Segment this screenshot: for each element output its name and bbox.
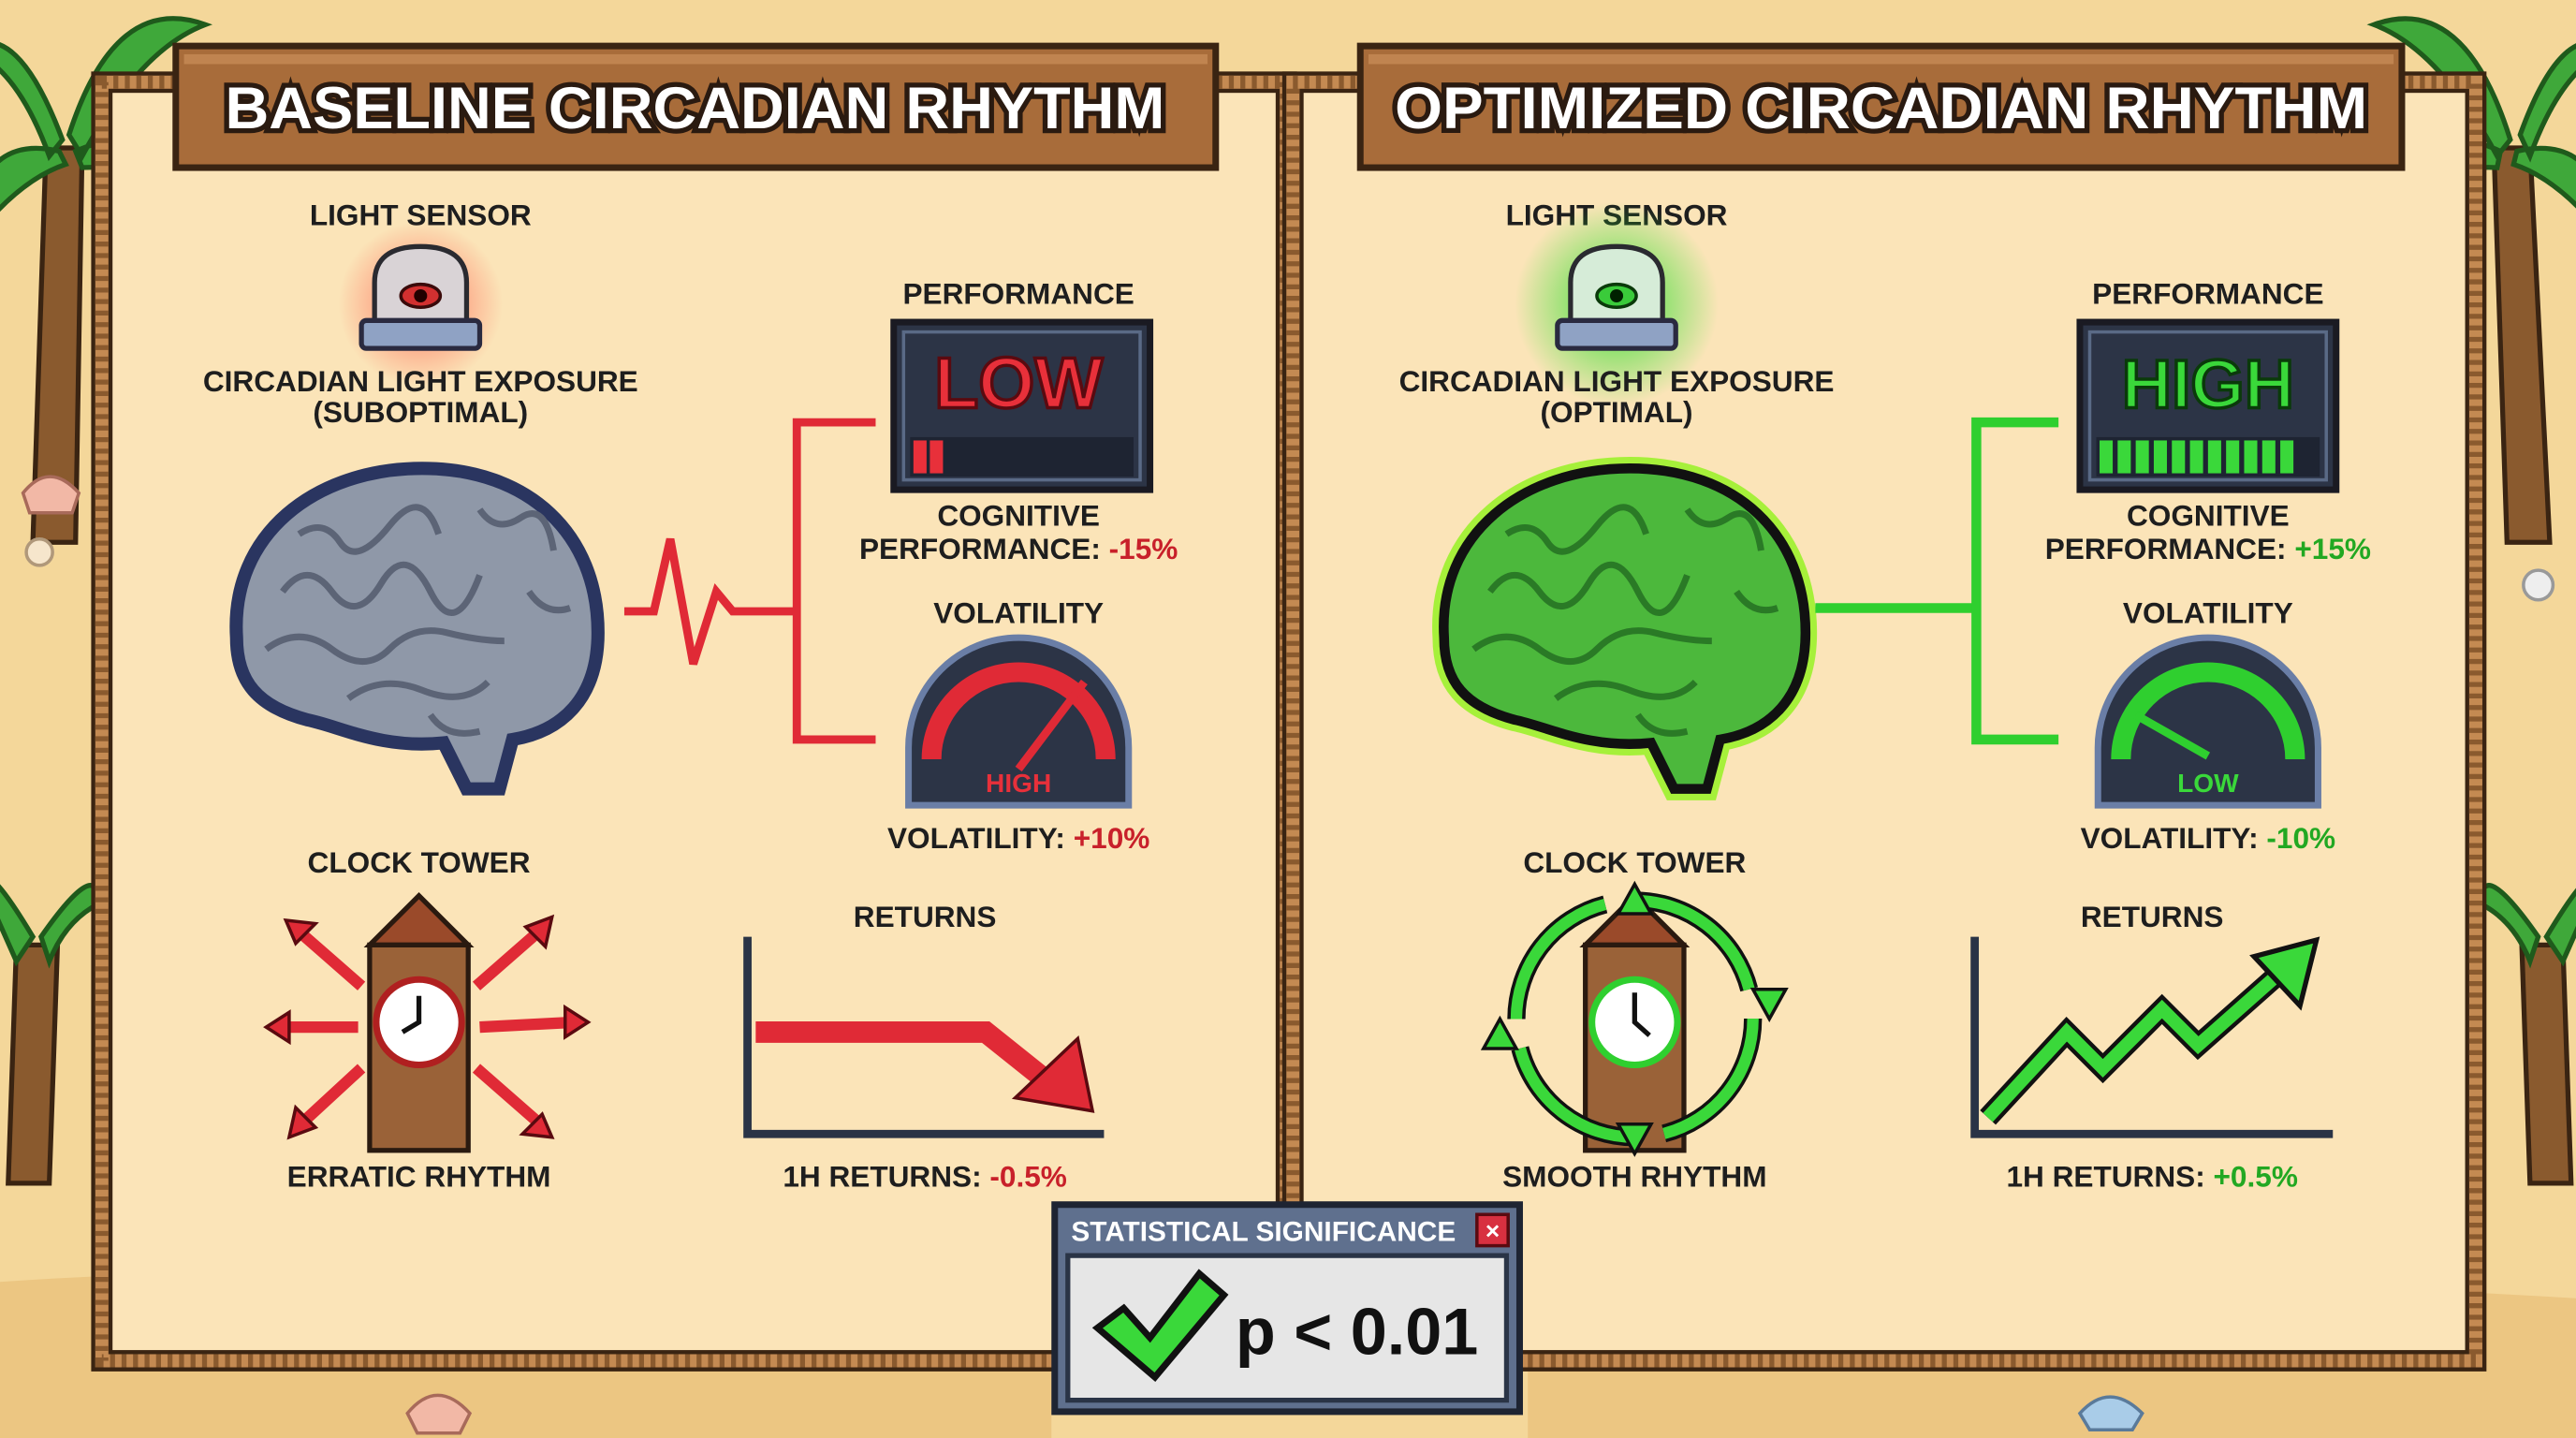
clock tower: erratic [266,845,588,1193]
clock tower: erratic: ERRATIC RHYTHM [287,1159,550,1193]
light sensor: optimized: CIRCADIAN LIGHT EXPOSURE [1399,364,1834,398]
heartbeat + bracket: red [624,422,875,740]
performance: LOW: LOW [934,343,1103,423]
clock tower: smooth: CLOCK TOWER [1523,845,1747,879]
performance: HIGH: HIGH [2122,345,2294,422]
clock tower: smooth: SMOOTH RHYTHM [1502,1159,1767,1193]
light sensor: optimized: LIGHT SENSOR [1506,198,1728,231]
volatility gauge: HIGH: VOLATILITY: +10% [887,821,1149,855]
palm tree: bottom-left [0,878,98,1183]
light sensor: optimized [1399,198,1834,429]
palm tree: top-left [0,19,205,542]
title: baseline: BASELINE CIRCADIAN RHYTHM [225,76,1164,141]
panel: baseline [102,82,1286,1360]
callout: statistical significance [1055,1205,1519,1412]
returns chart: up: 1H RETURNS: +0.5% [2006,1159,2298,1193]
volatility gauge: HIGH: VOLATILITY [933,595,1104,629]
light sensor: baseline: LIGHT SENSOR [310,198,532,231]
returns chart: up [1975,900,2333,1193]
performance: LOW: PERFORMANCE: -15% [859,532,1178,565]
callout: statistical significance: STATISTICAL SIGNIFICANCE [1071,1216,1456,1247]
performance: HIGH [2045,277,2371,565]
performance: LOW: PERFORMANCE [902,277,1134,311]
brain: gray [236,468,598,789]
returns chart: down: 1H RETURNS: -0.5% [783,1159,1067,1193]
clock tower: erratic: CLOCK TOWER [308,845,531,879]
bracket: green [1815,422,2058,740]
volatility gauge: HIGH: HIGH [986,769,1051,798]
callout: statistical significance: × [1486,1217,1500,1245]
performance: HIGH: COGNITIVE [2127,499,2290,533]
shells [23,477,2553,1433]
performance: HIGH: PERFORMANCE [2092,277,2324,311]
brain: green [1443,468,1806,789]
performance: HIGH: PERFORMANCE: +15% [2045,532,2371,565]
returns chart: down: RETURNS [854,900,996,933]
light sensor: optimized: (OPTIMAL) [1540,395,1693,429]
volatility gauge: LOW: LOW [2177,769,2239,798]
light sensor: baseline: CIRCADIAN LIGHT EXPOSURE [203,364,638,398]
volatility gauge: LOW [2081,595,2335,855]
title: baseline [176,46,1216,168]
performance: LOW: COGNITIVE [937,499,1100,533]
light sensor: baseline [203,198,638,429]
callout: statistical significance: p < 0.01 [1236,1294,1478,1368]
clock tower: smooth [1484,845,1786,1193]
volatility gauge: LOW: VOLATILITY: -10% [2081,821,2335,855]
palm tree: bottom-right [2481,878,2576,1183]
panel: optimized [1293,82,2476,1360]
title: optimized [1360,46,2402,168]
palm tree: top-right [2374,19,2576,542]
performance: LOW [859,277,1178,565]
volatility gauge: LOW: VOLATILITY [2123,595,2293,629]
title: optimized: OPTIMIZED CIRCADIAN RHYTHM [1395,76,2367,141]
returns chart: down [748,900,1104,1193]
volatility gauge: HIGH [887,595,1149,855]
light sensor: baseline: (SUBOPTIMAL) [313,395,528,429]
returns chart: up: RETURNS [2081,900,2223,933]
